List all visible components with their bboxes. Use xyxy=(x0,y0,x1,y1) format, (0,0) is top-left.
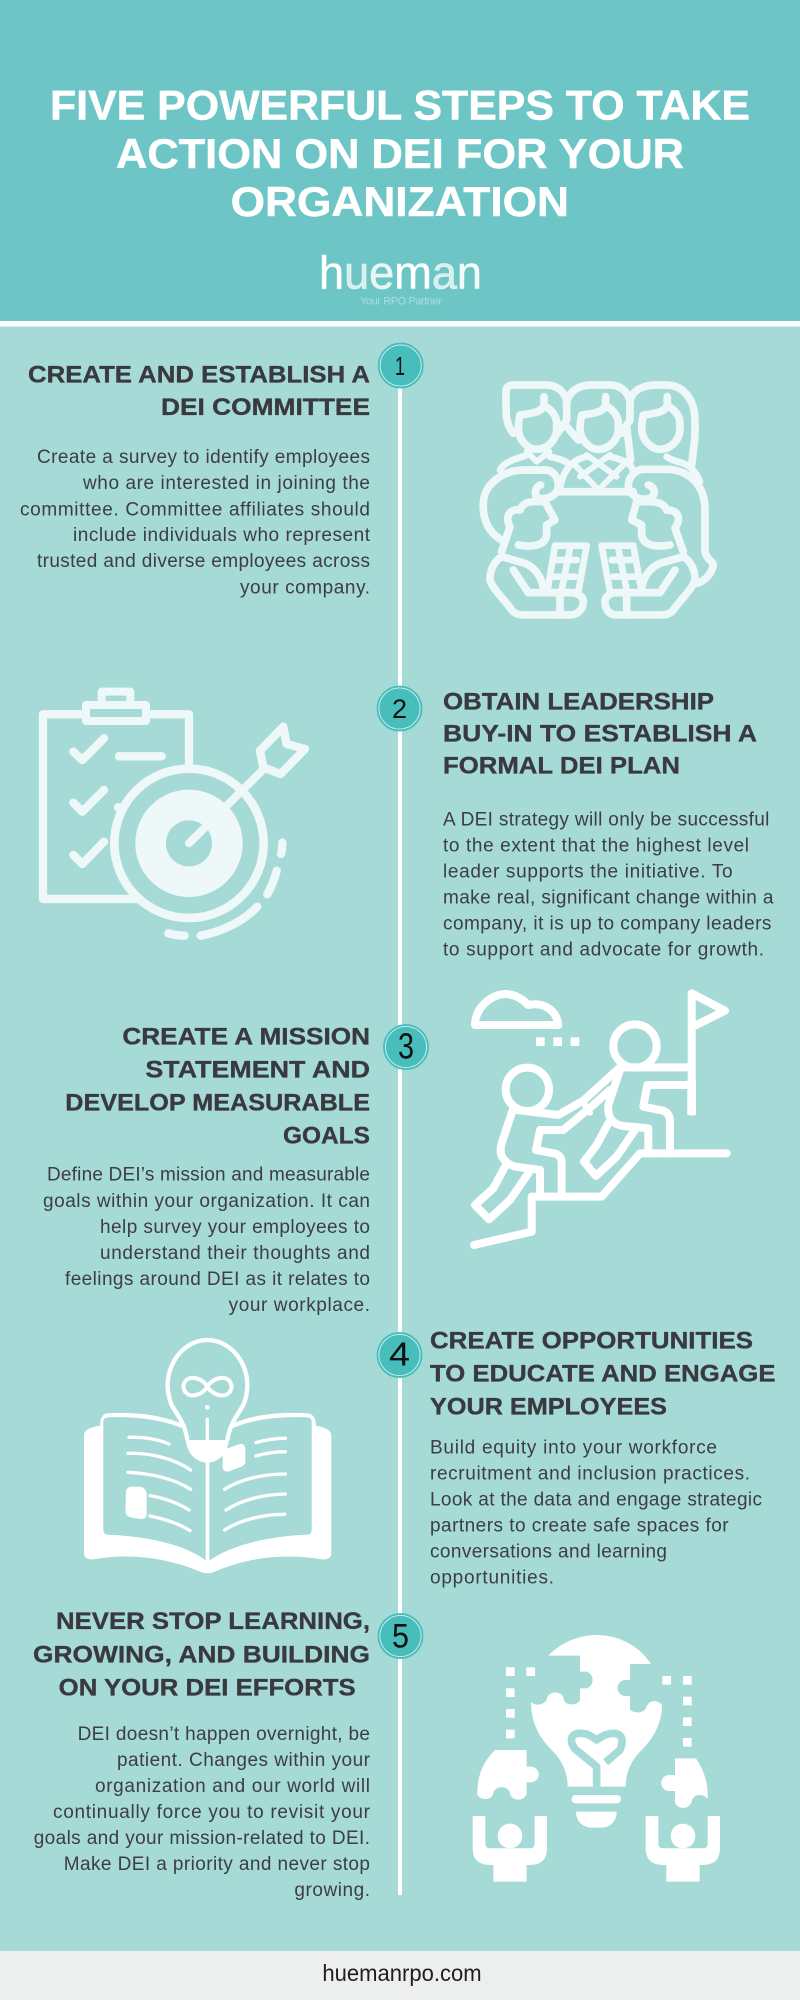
step 2 heading: BUY-IN TO ESTABLISH A xyxy=(443,720,757,748)
step 5 number badge xyxy=(378,1614,423,1658)
step 4 body text: opportunities. xyxy=(430,1568,554,1589)
step 1 panel xyxy=(20,343,713,615)
step 2 heading xyxy=(443,688,757,779)
step 3 body text: goals within your organization. It can xyxy=(43,1191,370,1212)
title: ORGANIZATION xyxy=(231,178,569,225)
step 5 heading: ON YOUR DEI EFFORTS xyxy=(59,1674,356,1702)
step 1 body text: who are interested in joining the xyxy=(82,473,370,494)
step 1 body text: Create a survey to identify employees xyxy=(37,447,370,468)
title xyxy=(50,82,750,225)
icon: climbers reaching a flag xyxy=(474,993,727,1245)
step 2 body text xyxy=(443,810,774,961)
step 4 heading: TO EDUCATE AND ENGAGE xyxy=(430,1361,776,1388)
step 4 heading xyxy=(430,1328,776,1420)
step 1 heading: DEI COMMITTEE xyxy=(161,394,370,421)
step 4 body text: recruitment and inclusion practices. xyxy=(430,1464,750,1485)
logo: hueman: hueman xyxy=(319,246,482,298)
step 1 body text: include individuals who represent xyxy=(73,525,371,546)
step 2 number badge xyxy=(377,686,422,731)
header band xyxy=(0,0,800,326)
step 3 number badge: 3 xyxy=(398,1026,414,1066)
step 4 heading: YOUR EMPLOYEES xyxy=(430,1394,667,1420)
step 2 body text: make real, significant change within a xyxy=(443,888,774,909)
step 2 heading: FORMAL DEI PLAN xyxy=(443,752,680,779)
step 4 body text: conversations and learning xyxy=(430,1542,667,1563)
icon: team around a table xyxy=(483,385,713,615)
step 2 body text: company, it is up to company leaders xyxy=(443,914,771,935)
step 2 number badge: 2 xyxy=(392,694,407,724)
icon: open book with light bulb xyxy=(84,1340,331,1573)
step 3 body text: understand their thoughts and xyxy=(100,1243,370,1264)
icon: puzzle light bulb with people xyxy=(473,1635,720,1882)
step 4 body text: Look at the data and engage strategic xyxy=(430,1490,762,1511)
step 5 body text: Make DEI a priority and never stop xyxy=(64,1854,370,1875)
step 2 heading: OBTAIN LEADERSHIP xyxy=(443,688,714,715)
step 2 panel xyxy=(43,686,774,961)
step 3 number badge xyxy=(384,1025,428,1069)
step 3 heading: STATEMENT AND xyxy=(145,1057,370,1084)
step 3 heading: GOALS xyxy=(283,1122,370,1150)
footer bar: huemanrpo.com xyxy=(322,1960,482,1986)
step 5 body text: growing. xyxy=(294,1880,370,1901)
step 5 body text: continually force you to revisit your xyxy=(53,1802,371,1823)
step 2 body text: leader supports the initiative. To xyxy=(443,862,733,883)
icon: clipboard and target xyxy=(43,692,305,936)
step 5 heading xyxy=(33,1608,370,1702)
step 1 number badge: 1 xyxy=(395,351,405,381)
step 1 heading xyxy=(28,362,370,421)
step 3 body text: Define DEI’s mission and measurable xyxy=(47,1165,370,1186)
step 5 heading: NEVER STOP LEARNING, xyxy=(56,1608,370,1635)
step 4 number badge: 4 xyxy=(389,1336,410,1372)
step 1 body text: committee. Committee affiliates should xyxy=(20,499,370,520)
step 4 panel xyxy=(84,1328,776,1589)
step 5 panel xyxy=(33,1608,720,1901)
step 2 body text: to support and advocate for growth. xyxy=(443,940,764,961)
step 5 heading: GROWING, AND BUILDING xyxy=(33,1642,370,1669)
step 2 body text: to the extent that the highest level xyxy=(443,836,749,857)
step 2 body text: A DEI strategy will only be successful xyxy=(443,810,769,831)
footer bar xyxy=(0,1951,800,2000)
step 4 body text xyxy=(430,1438,762,1589)
step 3 panel xyxy=(43,993,727,1316)
step 4 body text: partners to create safe spaces for xyxy=(430,1516,729,1537)
step 3 body text xyxy=(43,1165,370,1316)
step 3 heading: CREATE A MISSION xyxy=(122,1024,370,1051)
step 5 body text: DEI doesn’t happen overnight, be xyxy=(78,1724,370,1745)
step 3 heading: DEVELOP MEASURABLE xyxy=(65,1090,370,1116)
step 3 body text: your workplace. xyxy=(229,1295,370,1316)
timeline line xyxy=(398,345,402,1895)
title: ACTION ON DEI FOR YOUR xyxy=(116,130,684,177)
step 4 number badge xyxy=(377,1333,422,1377)
step 1 heading: CREATE AND ESTABLISH A xyxy=(28,362,370,388)
step 1 number badge xyxy=(378,343,423,388)
step 5 body text xyxy=(34,1724,371,1901)
step 1 body text: your company. xyxy=(240,577,370,598)
step 5 body text: patient. Changes within your xyxy=(117,1750,371,1771)
step 5 number badge: 5 xyxy=(392,1617,409,1655)
step 3 heading xyxy=(65,1024,370,1150)
title: FIVE POWERFUL STEPS TO TAKE xyxy=(50,82,750,129)
step 4 body text: Build equity into your workforce xyxy=(430,1438,717,1459)
step 1 body text xyxy=(20,447,371,598)
logo: hueman: Your RPO Partner xyxy=(360,296,442,308)
step 5 body text: goals and your mission-related to DEI. xyxy=(34,1828,370,1849)
step 4 heading: CREATE OPPORTUNITIES xyxy=(430,1328,753,1355)
step 3 body text: feelings around DEI as it relates to xyxy=(65,1269,370,1290)
step 3 body text: help survey your employees to xyxy=(100,1217,370,1238)
step 5 body text: organization and our world will xyxy=(95,1776,370,1797)
step 1 body text: trusted and diverse employees across xyxy=(37,551,370,572)
